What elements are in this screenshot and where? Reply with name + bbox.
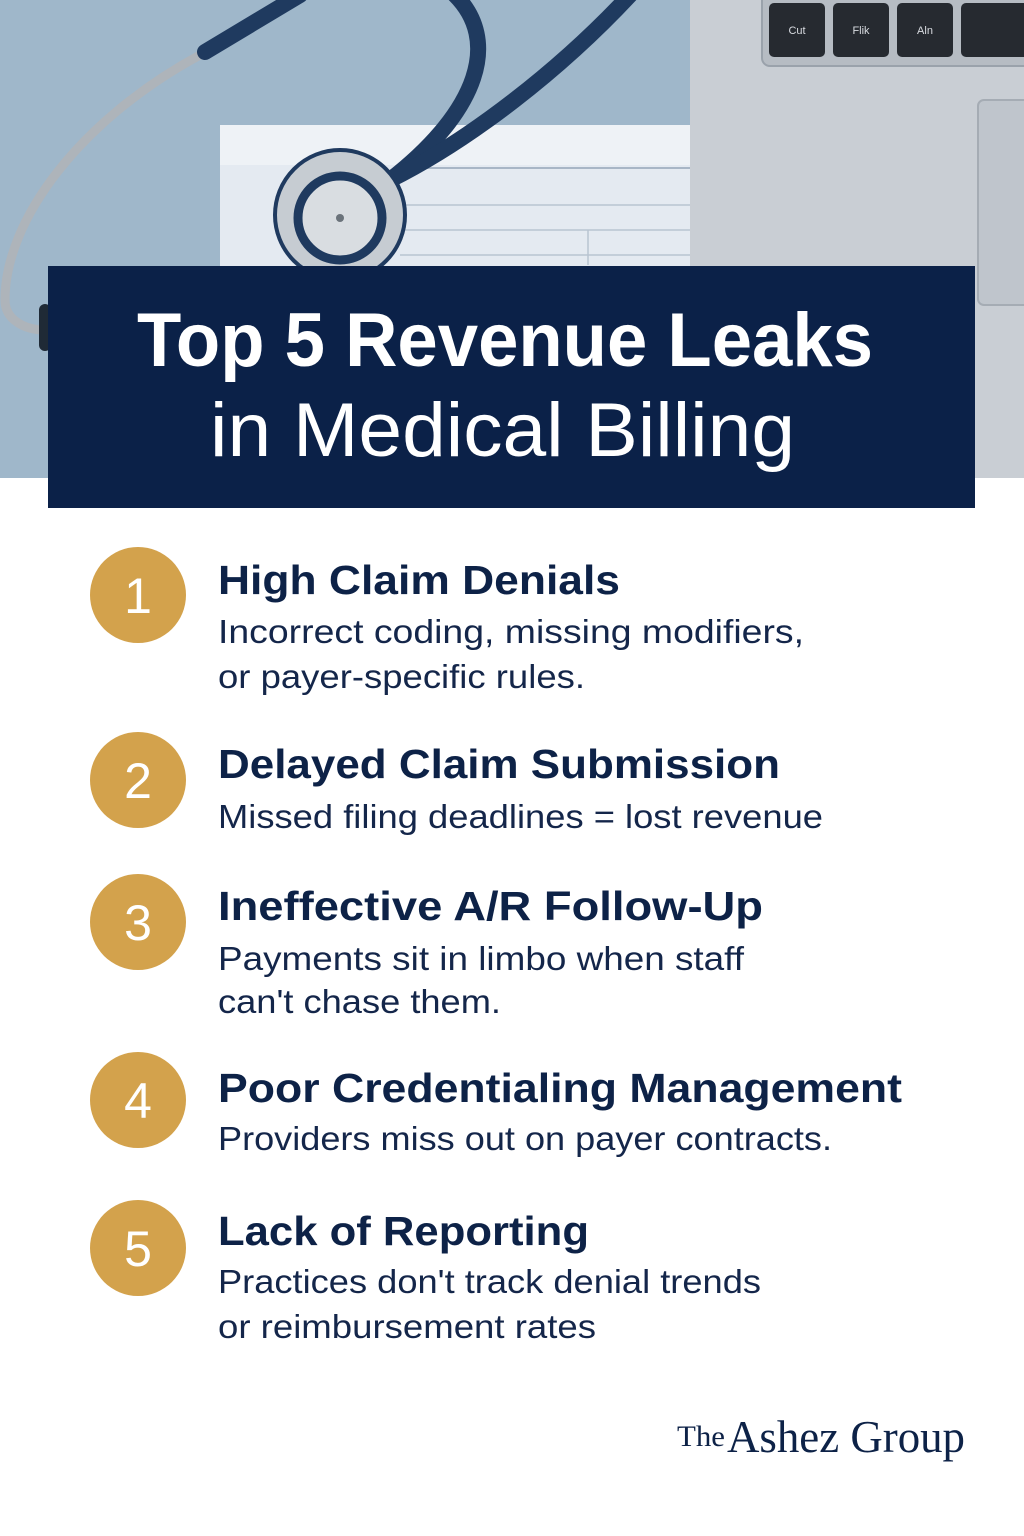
item 2: Delayed Claim Submission	[218, 741, 780, 787]
item 4: Poor Credentialing Management	[218, 1065, 902, 1111]
title box	[48, 266, 975, 508]
item 1: Incorrect coding, missing modifiers,	[218, 613, 804, 650]
item 2: 2	[124, 753, 152, 809]
item 1	[90, 547, 804, 695]
laptop	[690, 0, 1024, 478]
title box: in Medical Billing	[210, 388, 795, 473]
laptop: Cut	[788, 25, 806, 37]
item 5: 5	[124, 1221, 152, 1277]
laptop: Flik	[852, 25, 870, 37]
item 2	[90, 732, 823, 835]
header photo	[0, 0, 1024, 478]
item 2: Missed filing deadlines = lost revenue	[218, 798, 823, 835]
item 4	[90, 1052, 902, 1157]
item 5: Practices don't track denial trends	[218, 1263, 761, 1300]
item 5: Lack of Reporting	[218, 1208, 589, 1254]
title box: Top 5 Revenue Leaks	[137, 298, 873, 383]
item 3: Ineffective A/R Follow-Up	[218, 883, 763, 929]
item 1: High Claim Denials	[218, 557, 620, 603]
item 1: 1	[124, 568, 152, 624]
item 1: or payer-specific rules.	[218, 658, 585, 695]
paper document	[220, 125, 690, 285]
logo: Ashez Group	[727, 1411, 965, 1462]
laptop: Aln	[917, 25, 933, 37]
item 5	[90, 1200, 761, 1345]
item 5: or reimbursement rates	[218, 1308, 596, 1345]
item 3	[90, 874, 763, 1020]
item 3: Payments sit in limbo when staff	[218, 940, 745, 977]
item 3: 3	[124, 895, 152, 951]
item 4: 4	[124, 1073, 152, 1129]
logo: The	[677, 1420, 725, 1453]
stethoscope	[5, 0, 630, 345]
item 3: can't chase them.	[218, 983, 501, 1020]
item 4: Providers miss out on payer contracts.	[218, 1120, 832, 1157]
